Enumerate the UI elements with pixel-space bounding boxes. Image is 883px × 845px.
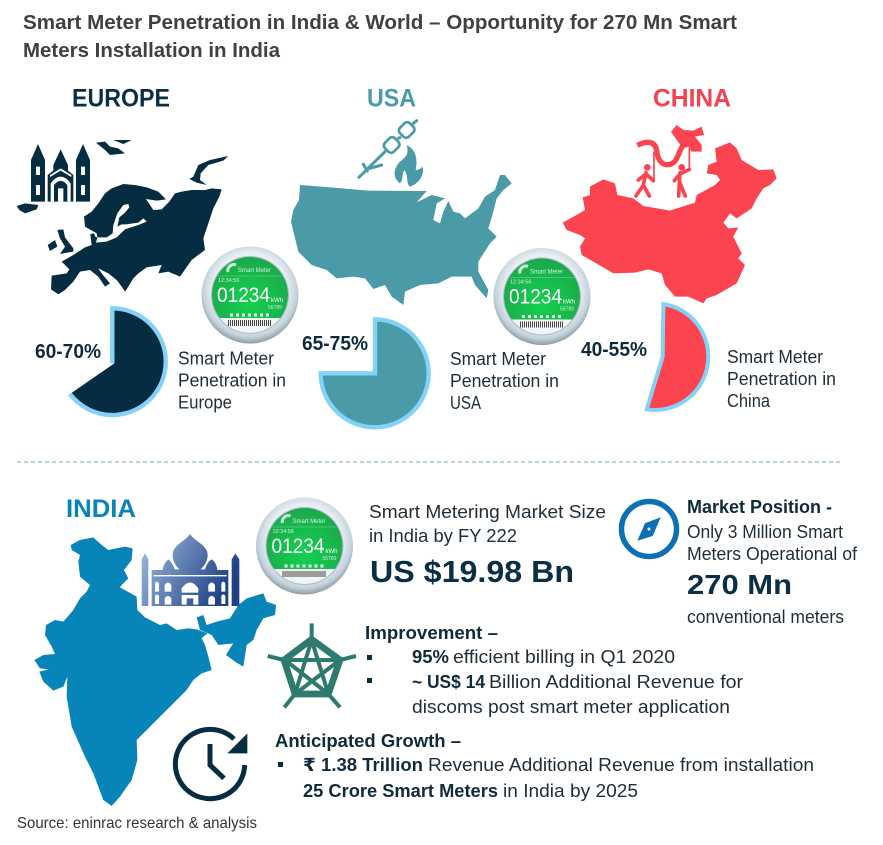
source: Source: eninrac research & analysis [17, 815, 257, 832]
text: improvement: ~ US$ 14 [412, 672, 485, 692]
text: improvement: discoms post smart meter application [412, 697, 730, 717]
meter: USA: 01234 [509, 286, 562, 308]
title [23, 12, 737, 62]
text: USA penetration: USA [450, 393, 481, 413]
meter: India [256, 498, 353, 594]
meter: USA: 12:34:56 [510, 280, 531, 286]
text: market size: Smart Metering Market Size [369, 502, 606, 522]
meter: India: kWh [326, 549, 338, 555]
text: USA penetration: Smart Meter [450, 349, 546, 369]
icon: compass [622, 502, 676, 556]
text: Europe penetration: Europe [178, 392, 232, 412]
text: Europe penetration: Smart Meter [178, 348, 274, 368]
map: India [34, 537, 276, 806]
text: anticipated growth: in India by 2025 [503, 781, 638, 801]
map: Europe [17, 140, 228, 294]
meter: Europe: kWh [271, 298, 283, 304]
heading: Europe: EUROPE [72, 84, 170, 112]
icon: dragon dance [636, 125, 704, 196]
text: market position [687, 497, 858, 627]
text: USA penetration: Penetration in [450, 371, 559, 391]
label: 40-55%: 40-55% [581, 339, 647, 361]
text: improvement: efficient billing in Q1 2020 [453, 647, 675, 667]
text: Europe penetration: Penetration in [178, 370, 286, 390]
text: market size: US $19.98 Bn [370, 554, 574, 589]
pie: China [647, 304, 708, 410]
meter: India: 56789 [322, 556, 337, 562]
meter: Europe: 56789 [268, 305, 282, 311]
text: anticipated growth: Revenue Additional Revenue from installation [428, 755, 814, 775]
text: market position: conventional meters [687, 607, 844, 627]
meter: India: 01234 [272, 535, 325, 558]
map: China [563, 142, 777, 303]
meter: Europe: 12:34:56 [218, 278, 239, 284]
map: USA [291, 175, 512, 305]
text: improvement: 95% [412, 647, 449, 667]
heading: India: INDIA [66, 495, 136, 523]
text: China penetration: Penetration in [727, 369, 836, 389]
meter: India: 12:34:56 [272, 529, 294, 535]
pie: USA [321, 319, 429, 427]
label: 65-75%: 65-75% [302, 333, 368, 355]
text: China penetration: Smart Meter [727, 347, 823, 367]
icon: marshmallows over fire [359, 121, 423, 187]
text: market size: in India by FY 222 [369, 526, 517, 546]
text: anticipated growth [275, 731, 814, 801]
meter: USA: Smart Meter [530, 270, 563, 276]
icon: cathedral [31, 144, 90, 202]
text: improvement: Improvement – [365, 623, 498, 643]
text: market size [369, 502, 606, 589]
text: market position: Only 3 Million Smart [687, 522, 843, 542]
meter: Europe: 01234 [217, 284, 270, 307]
meter: Europe: Smart Meter [238, 268, 271, 274]
text: anticipated growth: ₹ 1.38 Trillion [303, 755, 423, 775]
title: Smart Meter Penetration in India & World – Opportunity for 270 Mn Smart [23, 12, 737, 34]
pie: Europe [70, 308, 166, 415]
label: 60-70%: 60-70% [35, 341, 101, 363]
icon: radar chart [268, 623, 356, 707]
text: Europe penetration [178, 348, 286, 412]
text: market position: Meters Operational of [687, 544, 858, 564]
meter: USA: 56789 [560, 306, 574, 312]
text: USA penetration [450, 349, 559, 413]
heading: USA: USA [367, 84, 416, 112]
meter: Europe [202, 246, 298, 344]
icon: clock with arrow [175, 729, 247, 799]
text: improvement: Billion Additional Revenue for [489, 672, 743, 692]
heading: China: CHINA [653, 84, 731, 112]
text: anticipated growth: 25 Crore Smart Meters [303, 781, 498, 801]
text: China penetration: China [727, 391, 771, 411]
meter: India: Smart Meter [292, 519, 326, 525]
title: Meters Installation in India [23, 40, 281, 62]
meter: USA [494, 248, 590, 345]
meter: USA: kWh [563, 300, 575, 306]
text: China penetration [727, 347, 836, 411]
text: anticipated growth: Anticipated Growth – [275, 731, 461, 751]
text: improvement [365, 623, 743, 717]
text: market position: 270 Mn [687, 569, 792, 600]
icon: Taj Mahal [142, 534, 239, 606]
text: market position: Market Position - [687, 497, 832, 517]
